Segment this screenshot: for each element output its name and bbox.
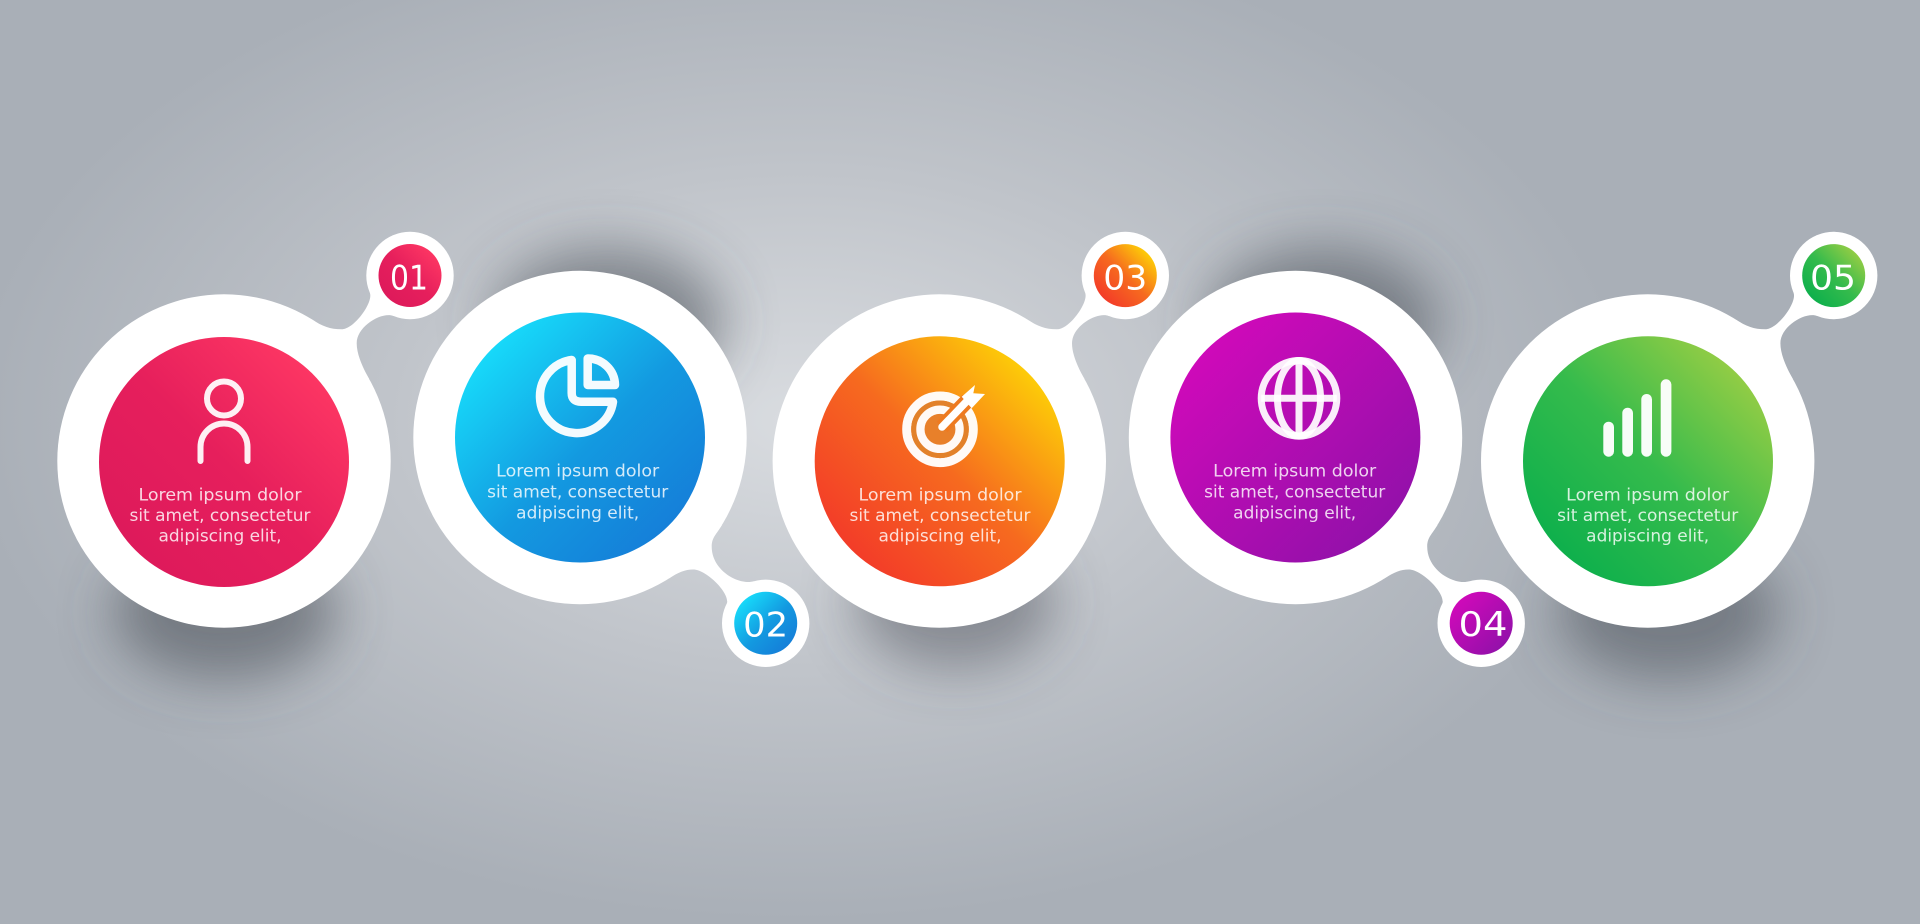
text block: adipiscing elit, <box>516 503 639 522</box>
panel: step 01 <box>57 232 454 628</box>
number badge 03 <box>1094 244 1157 307</box>
text block: adipiscing elit, <box>1586 527 1709 546</box>
icon: pie chart <box>540 358 615 433</box>
white disc with connector <box>413 271 809 667</box>
text block <box>487 462 668 522</box>
panel: step 02 <box>413 271 809 667</box>
text block: sit amet, consectetur <box>1557 506 1738 525</box>
drop shadows <box>113 248 1778 680</box>
text block: Lorem ipsum dolor <box>858 486 1022 505</box>
panel: step 05 <box>1481 232 1877 628</box>
icon: target with arrow <box>907 385 985 463</box>
text block: sit amet, consectetur <box>850 506 1031 525</box>
colour disc <box>455 312 705 562</box>
text block: sit amet, consectetur <box>487 482 668 501</box>
number badge 04: 04 <box>1458 605 1508 645</box>
number badge 05 <box>1802 244 1865 307</box>
white disc with connector <box>1129 271 1525 667</box>
panel: step 04 <box>1129 271 1525 667</box>
number badge 02 <box>734 592 797 655</box>
colour disc <box>1523 336 1773 586</box>
number badge 03: 03 <box>1103 258 1147 298</box>
colour disc <box>815 336 1065 586</box>
text block: adipiscing elit, <box>878 527 1002 546</box>
text block: adipiscing elit, <box>158 527 282 546</box>
white disc with connector <box>773 232 1169 628</box>
number badge 01 <box>378 244 442 307</box>
colour disc <box>99 337 349 587</box>
number badge 01: 01 <box>390 258 428 298</box>
white disc with connector <box>57 232 454 628</box>
colour disc <box>1170 312 1420 562</box>
number badge 05: 05 <box>1810 258 1856 298</box>
text block: Lorem ipsum dolor <box>1213 462 1376 481</box>
panel: step 03 <box>773 232 1169 628</box>
icon: person <box>200 382 248 461</box>
icon: bar chart <box>1603 379 1671 457</box>
text block: sit amet, consectetur <box>1204 482 1385 501</box>
text block: Lorem ipsum dolor <box>138 486 302 505</box>
number badge 04 <box>1450 592 1513 655</box>
text block <box>1204 462 1385 522</box>
icon: globe <box>1261 360 1337 436</box>
white disc with connector <box>1481 232 1877 628</box>
text block <box>130 486 311 546</box>
text block: adipiscing elit, <box>1233 503 1356 522</box>
number badge 02: 02 <box>743 606 788 646</box>
text block: sit amet, consectetur <box>130 506 311 525</box>
text block <box>1557 486 1738 546</box>
text block: Lorem ipsum dolor <box>496 462 659 481</box>
text block: Lorem ipsum dolor <box>1566 486 1729 505</box>
text block <box>850 486 1031 546</box>
